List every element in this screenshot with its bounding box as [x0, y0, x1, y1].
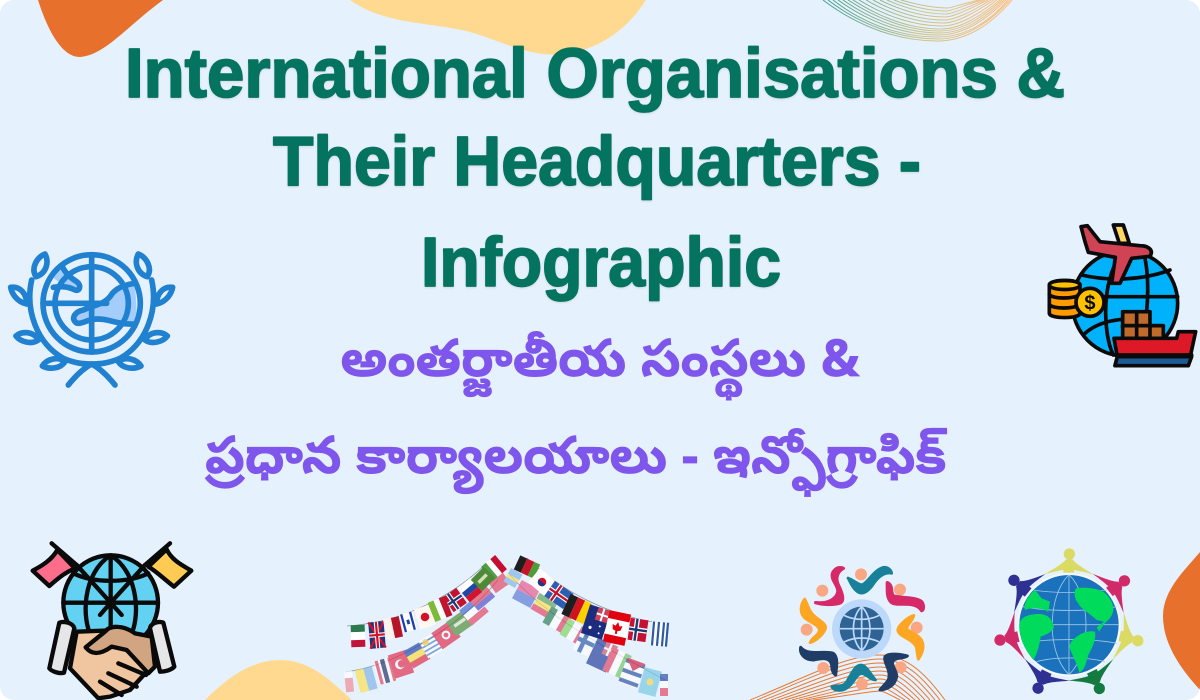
- flag: Argentina-like: [459, 602, 489, 626]
- flag: New Zealand: [586, 637, 618, 673]
- flag: red white: [383, 616, 403, 640]
- person: yellow right: [1112, 611, 1149, 666]
- flag: Saudi pale: [446, 609, 474, 637]
- flag: Mexico pale: [542, 606, 572, 634]
- decoration: right orange blob: [1163, 552, 1200, 690]
- string lines: [345, 558, 668, 680]
- flag: red navy stripes: [373, 657, 397, 685]
- person: green lower right: [1068, 659, 1125, 700]
- decoration: top yellow blob: [350, 0, 646, 55]
- flag: green white red: [428, 596, 452, 622]
- flag: Norway: [628, 618, 648, 642]
- Telugu subtitle: [205, 331, 947, 498]
- flag: Kazakhstan: [638, 667, 662, 697]
- person: yellow top: [1044, 548, 1094, 575]
- flag: pale pink: [470, 586, 495, 611]
- icon: people ring around earth: [989, 548, 1149, 700]
- flag: green white red pale: [560, 618, 583, 644]
- decoration: top-left orange blob: [38, 0, 163, 57]
- flag: pale blue yellow: [503, 568, 523, 588]
- flag: Iceland: [544, 581, 574, 609]
- flag: Turkey: [388, 649, 414, 679]
- flag: Saudi Arabia: [471, 567, 495, 591]
- flag: Australia: [581, 604, 611, 640]
- person: navy lower left: [1013, 659, 1070, 700]
- decoration: bottom yellow blob: [205, 660, 352, 700]
- person: pink upper right: [1092, 558, 1144, 613]
- flag: green yellow pink: [530, 593, 558, 619]
- flag: France partial: [660, 674, 668, 696]
- flag: pink blue: [512, 580, 540, 608]
- person: navy upper left: [994, 558, 1045, 613]
- flag: Oman: [602, 647, 632, 679]
- Telugu subtitle: అంతర్జాతీయ సంస్థలు &: [341, 331, 860, 401]
- flag: Italy: [481, 555, 507, 581]
- flag: Cuba: [618, 657, 646, 689]
- flag: South Korea: [528, 568, 556, 596]
- flag: Mexico: [351, 625, 365, 647]
- title: [125, 34, 1065, 301]
- pale flags lower left: [344, 568, 668, 697]
- flag: Romania: [403, 641, 431, 669]
- flag: Afghanistan: [514, 555, 540, 579]
- title: International Organisations &: [125, 34, 1065, 112]
- flag: Israel: [399, 611, 417, 633]
- flag: pale red: [490, 570, 508, 594]
- flag: partial white red: [344, 671, 354, 692]
- icon: globe with plane, coins and ship: $: [1084, 292, 1096, 314]
- flag: Slovakia: [458, 578, 482, 602]
- flag: Uruguay: [418, 631, 446, 659]
- flag: Canada: [603, 610, 631, 646]
- flag: Germany: [561, 594, 593, 624]
- icon: globe with plane, coins and ship: [1049, 225, 1196, 366]
- Telugu subtitle: ప్రధాన కార్యాలయాలు - ఇన్ఫోగ్రాఫిక్: [205, 428, 947, 498]
- decoration: bottom orange line mesh: [750, 655, 945, 700]
- title: Their Headquarters -: [273, 122, 921, 200]
- title: Infographic: [421, 223, 781, 301]
- decoration: top-right line mesh: [823, 0, 1012, 41]
- flag: Greece: [650, 621, 668, 647]
- flag: Tunisia: [431, 621, 461, 649]
- flag: UK: [368, 621, 386, 649]
- flag: Japan: [414, 605, 436, 629]
- person: pink left: [989, 611, 1026, 666]
- flag: Norway: [443, 588, 467, 612]
- flag: blue yellow: [355, 666, 378, 693]
- icon: UN globe with laurel: [11, 254, 173, 385]
- icon: people around globe (circle): [800, 567, 923, 691]
- icon: handshake under globe with flags: [33, 543, 191, 698]
- bunting: flags: [344, 555, 668, 697]
- flag: Finland: [573, 631, 597, 657]
